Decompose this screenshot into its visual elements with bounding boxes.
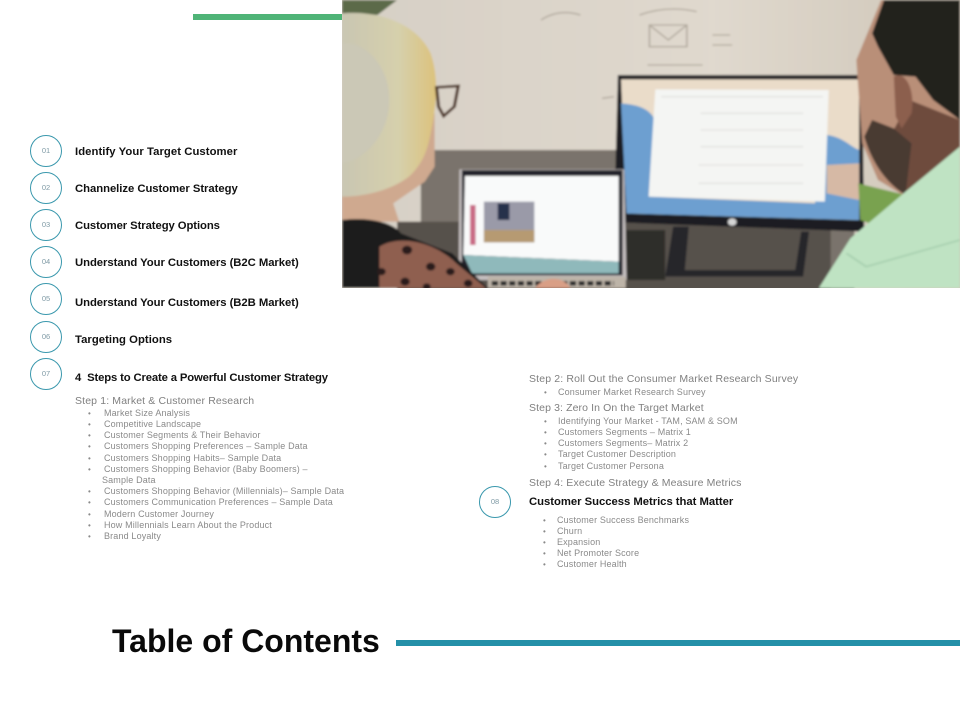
- step 1 text block: [75, 395, 344, 541]
- item 08: [479, 486, 734, 518]
- step 3 text block: [529, 402, 738, 471]
- step 1 text block: •: [88, 420, 91, 429]
- item 02: Channelize Customer Strategy: [75, 183, 238, 195]
- step 3 text block: •: [544, 450, 547, 459]
- item 08 bullet list: •: [543, 527, 546, 536]
- step 1 text block: How Millennials Learn About the Product: [104, 520, 272, 530]
- item 04: Understand Your Customers (B2C Market): [75, 257, 299, 269]
- step 3 text block: •: [544, 462, 547, 471]
- step 2 text block: Consumer Market Research Survey: [558, 387, 706, 397]
- item 03: Customer Strategy Options: [75, 220, 220, 232]
- item 03: [30, 209, 220, 241]
- step 1 text block: •: [88, 510, 91, 519]
- item 08 bullet list: •: [543, 538, 546, 547]
- step 1 text block: Customer Segments & Their Behavior: [104, 430, 261, 440]
- item 02: 02: [42, 183, 50, 192]
- step 3 text block: •: [544, 428, 547, 437]
- step 3 text block: Customers Segments – Matrix 1: [558, 427, 691, 437]
- step 4 heading: Step 4: Execute Strategy & Measure Metrics: [529, 477, 741, 489]
- step 3 text block: Step 3: Zero In On the Target Market: [529, 402, 704, 414]
- step 1 text block: Modern Customer Journey: [104, 509, 214, 519]
- step 3 text block: •: [544, 417, 547, 426]
- step 1 text block: •: [88, 532, 91, 541]
- step 1 text block: Customers Shopping Behavior (Baby Boomers) –: [104, 464, 308, 474]
- step 1 text block: Customers Shopping Preferences – Sample Data: [104, 441, 308, 451]
- step 2 text block: •: [544, 388, 547, 397]
- step 1 text block: •: [88, 521, 91, 530]
- step 1 text block: Sample Data: [102, 475, 156, 485]
- item 08 bullet list: Customer Success Benchmarks: [557, 515, 689, 525]
- item 08 bullet list: •: [543, 560, 546, 569]
- item 08 bullet list: Churn: [557, 526, 582, 536]
- item 08 bullet list: Customer Health: [557, 559, 627, 569]
- step 2 text block: Step 2: Roll Out the Consumer Market Research Survey: [529, 373, 798, 385]
- item 04: [30, 246, 299, 278]
- step 3 text block: •: [544, 439, 547, 448]
- step 1 text block: •: [88, 498, 91, 507]
- item 05: 05: [42, 294, 50, 303]
- photo: two people working at a laptop and monitor: [342, 0, 960, 288]
- step 1 text block: •: [88, 487, 91, 496]
- step 3 text block: Customers Segments– Matrix 2: [558, 438, 688, 448]
- item 07: 07: [42, 369, 50, 378]
- item 01: Identify Your Target Customer: [75, 146, 237, 158]
- item 06: 06: [42, 332, 50, 341]
- item 08 bullet list: •: [543, 516, 546, 525]
- step 1 text block: Brand Loyalty: [104, 531, 161, 541]
- step 1 text block: •: [88, 465, 91, 474]
- item 08: Customer Success Metrics that Matter: [529, 496, 733, 508]
- item 08 bullet list: [543, 515, 689, 569]
- step 2 text block: [529, 373, 798, 397]
- item 03: 03: [42, 220, 50, 229]
- step 1 text block: Step 1: Market & Customer Research: [75, 395, 254, 407]
- item 01: [30, 135, 238, 167]
- item 06: Targeting Options: [75, 334, 172, 346]
- item 04: 04: [42, 257, 50, 266]
- step 3 text block: Identifying Your Market - TAM, SAM & SOM: [558, 416, 738, 426]
- step 1 text block: Market Size Analysis: [104, 408, 190, 418]
- item 01: 01: [42, 146, 50, 155]
- step 1 text block: •: [88, 431, 91, 440]
- item 08 bullet list: Expansion: [557, 537, 600, 547]
- item 05: Understand Your Customers (B2B Market): [75, 297, 299, 309]
- step 3 text block: Target Customer Persona: [558, 461, 664, 471]
- item 07: 4 Steps to Create a Powerful Customer Strategy: [75, 372, 328, 384]
- step 1 text block: •: [88, 442, 91, 451]
- item 05: [30, 283, 299, 315]
- teal title rule: [396, 640, 960, 646]
- step 1 text block: Competitive Landscape: [104, 419, 201, 429]
- item 08 bullet list: Net Promoter Score: [557, 548, 639, 558]
- step 3 text block: Target Customer Description: [558, 449, 676, 459]
- item 07: [30, 358, 328, 390]
- step 1 text block: •: [88, 409, 91, 418]
- item 06: [30, 321, 172, 353]
- step 1 text block: •: [88, 454, 91, 463]
- step 1 text block: Customers Shopping Behavior (Millennials)– Sample Data: [104, 486, 344, 496]
- step 1 text block: Customers Communication Preferences – Sample Data: [104, 497, 333, 507]
- green accent bar: [193, 14, 342, 20]
- item 02: [30, 172, 238, 204]
- item 08 bullet list: •: [543, 549, 546, 558]
- item 08: 08: [491, 497, 499, 506]
- step 1 text block: Customers Shopping Habits– Sample Data: [104, 453, 281, 463]
- title: Table of Contents: [112, 623, 380, 659]
